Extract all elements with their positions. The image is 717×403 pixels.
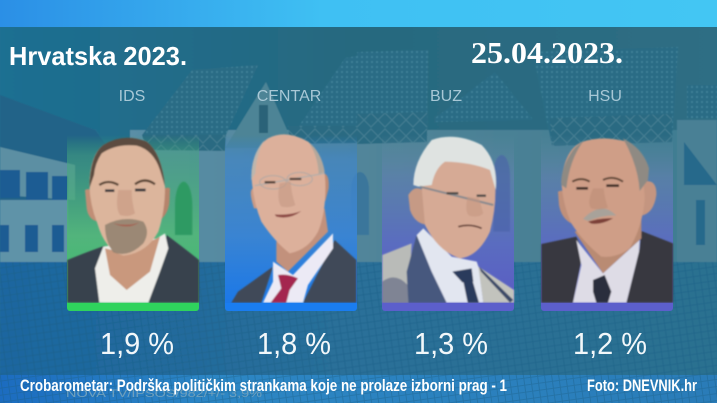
percentage: IDS: 1,9 % bbox=[100, 326, 174, 361]
bottom ticker bbox=[0, 375, 717, 403]
top blue band bbox=[0, 0, 717, 27]
party label: CENTAR: CENTAR bbox=[257, 88, 321, 105]
candidate column: IDS bbox=[67, 88, 199, 361]
church walls bbox=[130, 130, 717, 265]
colour bar: HSU bbox=[541, 303, 673, 311]
card tint: IDS bbox=[67, 135, 199, 303]
card tint: CENTAR bbox=[225, 135, 357, 303]
cobblestone ground bbox=[0, 262, 717, 403]
left building bbox=[0, 95, 110, 275]
portrait: IDS bbox=[67, 138, 199, 303]
percentage: HSU: 1,2 % bbox=[573, 326, 647, 361]
colour bar: BUZ bbox=[382, 303, 514, 311]
card tint: BUZ bbox=[382, 135, 514, 303]
colour bar: CENTAR bbox=[225, 303, 357, 311]
candidate column: HSU bbox=[541, 88, 673, 361]
percentage: BUZ: 1,3 % bbox=[414, 326, 488, 361]
date: 25.04.2023. bbox=[471, 35, 623, 70]
title: Hrvatska 2023. bbox=[9, 41, 187, 71]
right chapel detail bbox=[351, 120, 717, 270]
portrait: HSU bbox=[541, 138, 673, 303]
party label: IDS: IDS bbox=[119, 88, 145, 105]
portrait: BUZ bbox=[382, 137, 514, 303]
ticker headline: Crobarometar: Podrška političkim strankama koje ne prolaze izborni prag - 1 bbox=[20, 376, 507, 395]
percentage: CENTAR: 1,8 % bbox=[257, 326, 331, 361]
colour bar: IDS bbox=[67, 303, 199, 311]
party label: BUZ: BUZ bbox=[430, 88, 462, 105]
party label: HSU: HSU bbox=[588, 88, 622, 105]
church roof bbox=[142, 47, 717, 151]
portrait: CENTAR bbox=[231, 134, 356, 303]
card tint: HSU bbox=[541, 135, 673, 303]
ghost source text: NOVA TV/IPSOS/982/+/- 3,9% bbox=[66, 388, 262, 400]
candidate column: CENTAR bbox=[225, 88, 357, 361]
candidate column: BUZ bbox=[382, 88, 514, 361]
